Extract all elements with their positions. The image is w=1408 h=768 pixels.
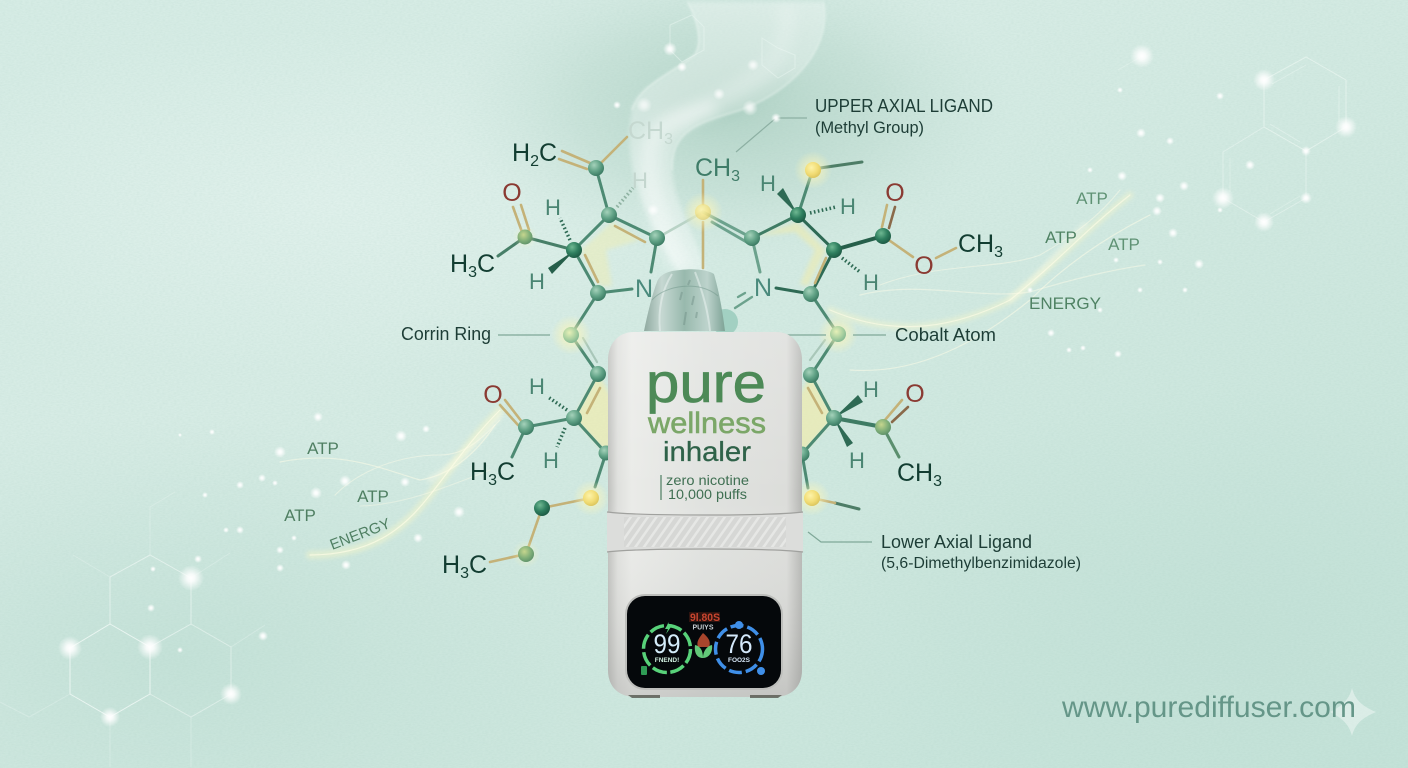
- molecule: atom labels: 3: [731, 168, 740, 185]
- molecule: atom labels: CH: [897, 459, 933, 487]
- focus ring gauge: 76: [726, 629, 752, 659]
- molecule: atom labels: C: [469, 551, 487, 579]
- molecule: atom labels: C: [539, 139, 557, 167]
- molecule: atom labels: H: [632, 168, 648, 193]
- brand text: [646, 351, 766, 502]
- hexagon network: top right: [1118, 56, 1346, 222]
- ATP labels: right: ENERGY: [1029, 294, 1101, 313]
- icon: four-point star: [1330, 688, 1376, 736]
- hexagon network: bottom left: [0, 492, 265, 767]
- molecule: atom labels: H: [849, 448, 865, 473]
- ATP labels: right: ATP: [1108, 235, 1140, 254]
- molecule: atom labels: N: [635, 275, 653, 303]
- molecule: atom labels: H: [442, 551, 460, 579]
- molecule: atom labels: O: [885, 179, 905, 207]
- molecule: atoms: [518, 160, 891, 562]
- molecule: atom labels: 3: [994, 244, 1003, 261]
- molecule: atom labels: 3: [460, 565, 469, 582]
- molecule: atom glows: [512, 151, 858, 568]
- molecule: atom labels: CH: [958, 230, 994, 258]
- smoke rising from inhaler: [613, 2, 824, 275]
- callout: corrin ring: Corrin Ring: [401, 324, 491, 344]
- callout: upper axial ligand: [736, 96, 993, 152]
- website url: www.purediffuser.com: [1061, 691, 1356, 724]
- molecule: atom labels: H: [863, 377, 879, 402]
- red puff counter: 9l.80S: [690, 612, 720, 624]
- brand text: 10,000 puffs: [668, 486, 747, 502]
- brand text: inhaler: [663, 436, 751, 467]
- callout: cobalt atom: Cobalt Atom: [895, 325, 996, 345]
- molecule: tan double bonds: [490, 137, 956, 562]
- brand text: pure: [646, 351, 766, 414]
- energy particles: [178, 87, 1223, 572]
- molecule: atom labels: 3: [488, 472, 497, 489]
- ATP labels: right: ATP: [1045, 228, 1077, 247]
- energy stream: right: [830, 190, 1150, 370]
- callout: lower axial ligand: Lower Axial Ligand: [881, 532, 1032, 552]
- sparkles: bottom left: [58, 555, 268, 727]
- red puff counter: PUIYS: [692, 624, 714, 632]
- callout: upper axial ligand: UPPER AXIAL LIGAND: [815, 96, 993, 116]
- molecule: atom labels: H: [450, 250, 468, 278]
- molecule: skeleton bonds: [498, 162, 899, 509]
- molecule: atom labels: CH: [695, 154, 731, 182]
- molecule: atom labels: H: [545, 195, 561, 220]
- brand text: wellness: [647, 407, 766, 440]
- molecule: atom labels: O: [905, 380, 925, 408]
- molecule: atom labels: C: [497, 458, 515, 486]
- molecule: atom labels: 3: [933, 473, 942, 490]
- focus ring gauge: [716, 621, 765, 675]
- ATP labels: right: [1029, 189, 1140, 313]
- energy ring gauge: 99: [654, 629, 680, 659]
- ATP labels: left: [284, 439, 393, 554]
- molecule: atom labels: O: [483, 381, 503, 409]
- molecule: atom labels: N: [754, 274, 772, 302]
- molecule: atom labels: O: [914, 252, 934, 280]
- textured band: [607, 512, 803, 552]
- icon: translucent mouthpiece: [644, 269, 738, 335]
- molecule: atom labels: H: [840, 194, 856, 219]
- display screen: [625, 594, 783, 690]
- callout: upper axial ligand: (Methyl Group): [815, 119, 924, 137]
- focus ring gauge: FOO2S: [728, 657, 751, 664]
- callout: lower axial ligand: [808, 532, 1081, 572]
- molecule: atom labels: H: [512, 139, 530, 167]
- molecule: atom labels: C: [477, 250, 495, 278]
- device body: [608, 332, 802, 697]
- callout: lower axial ligand: (5,6-Dimethylbenzimidazole): [881, 555, 1081, 572]
- molecule: atom labels: 2: [530, 153, 539, 170]
- molecule: atom labels: 3: [664, 131, 673, 148]
- molecule: ring highlights: [574, 222, 834, 454]
- energy stream: left: [280, 410, 500, 555]
- inhaler device: [607, 269, 803, 698]
- ATP labels: left: ENERGY: [328, 515, 393, 554]
- molecule: atom labels: [442, 117, 1003, 582]
- energy ring gauge: FNEND!: [655, 657, 679, 664]
- molecule: atom labels: 3: [468, 264, 477, 281]
- ATP labels: right: ATP: [1076, 189, 1108, 208]
- molecule: atom labels: H: [529, 269, 545, 294]
- molecule: atom labels: H: [543, 448, 559, 473]
- molecule: atom labels: H: [863, 270, 879, 295]
- red puff counter: [689, 612, 720, 632]
- molecule: atom labels: H: [470, 458, 488, 486]
- molecule: atom labels: H: [760, 171, 776, 196]
- sparkles: top right: [1130, 44, 1357, 232]
- device feet: [628, 695, 782, 698]
- molecule: wedge and hashed bonds: [548, 188, 863, 447]
- molecule: atom labels: CH: [628, 117, 664, 145]
- ATP labels: left: ATP: [307, 439, 339, 458]
- molecule: atom labels: O: [502, 179, 522, 207]
- energy ring gauge: [641, 622, 690, 675]
- molecule: atom labels: H: [529, 374, 545, 399]
- ATP labels: left: ATP: [357, 487, 389, 506]
- device body shading: [608, 332, 802, 697]
- icon: flame and leaf: [695, 633, 712, 658]
- brand text: zero nicotine: [666, 472, 749, 488]
- ATP labels: left: ATP: [284, 506, 316, 525]
